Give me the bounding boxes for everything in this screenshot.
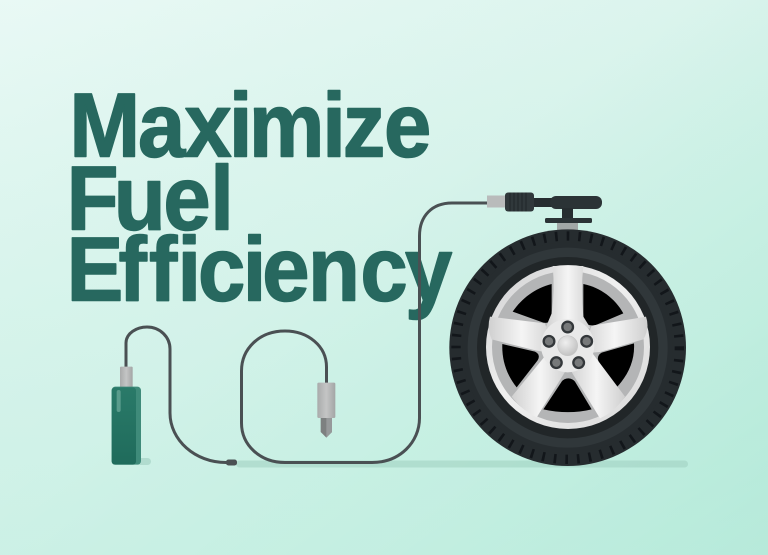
lug nuts: [544, 322, 592, 368]
ground shadow: [135, 458, 688, 468]
hose from bottle: [126, 327, 232, 462]
alloy rim: [486, 265, 650, 429]
wheel openings: [513, 284, 552, 323]
tire: [449, 229, 686, 466]
tread notches: [456, 236, 679, 459]
air hose: [126, 203, 488, 462]
title: Efficiency: [67, 218, 452, 320]
title: [67, 74, 452, 320]
hose from probe to gauge: [242, 203, 488, 462]
icon: metal probe: [317, 383, 335, 438]
icon: tire and alloy wheel: [449, 229, 686, 466]
hub cap: [558, 336, 578, 356]
spokes: [489, 266, 647, 418]
icon: green bottle: [112, 367, 141, 465]
title: Fuel: [67, 147, 234, 249]
title: Maximize: [69, 74, 431, 176]
hose end cap: [226, 460, 237, 466]
icon: pressure gauge connector: [487, 192, 602, 230]
